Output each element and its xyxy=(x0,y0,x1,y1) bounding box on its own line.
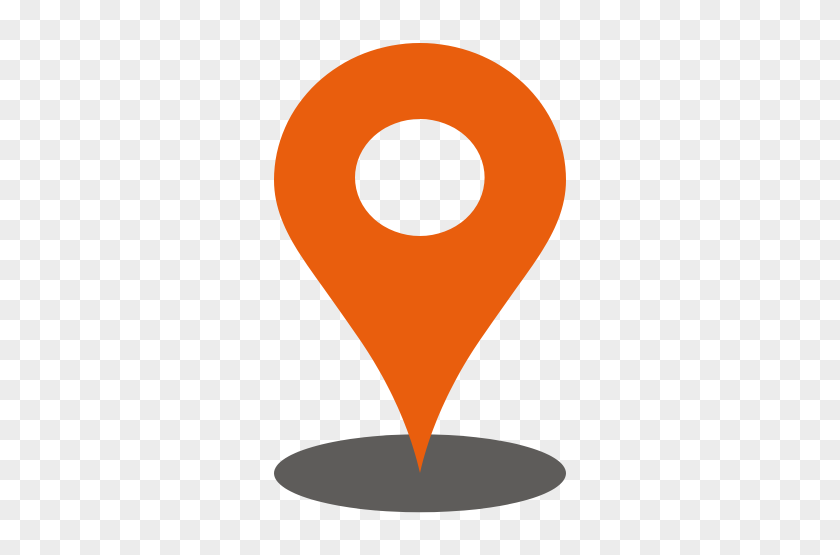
orange location pin with round hole xyxy=(274,43,566,473)
pin shadow ellipse xyxy=(274,434,566,512)
icon: map pin with ground shadow xyxy=(274,43,566,512)
